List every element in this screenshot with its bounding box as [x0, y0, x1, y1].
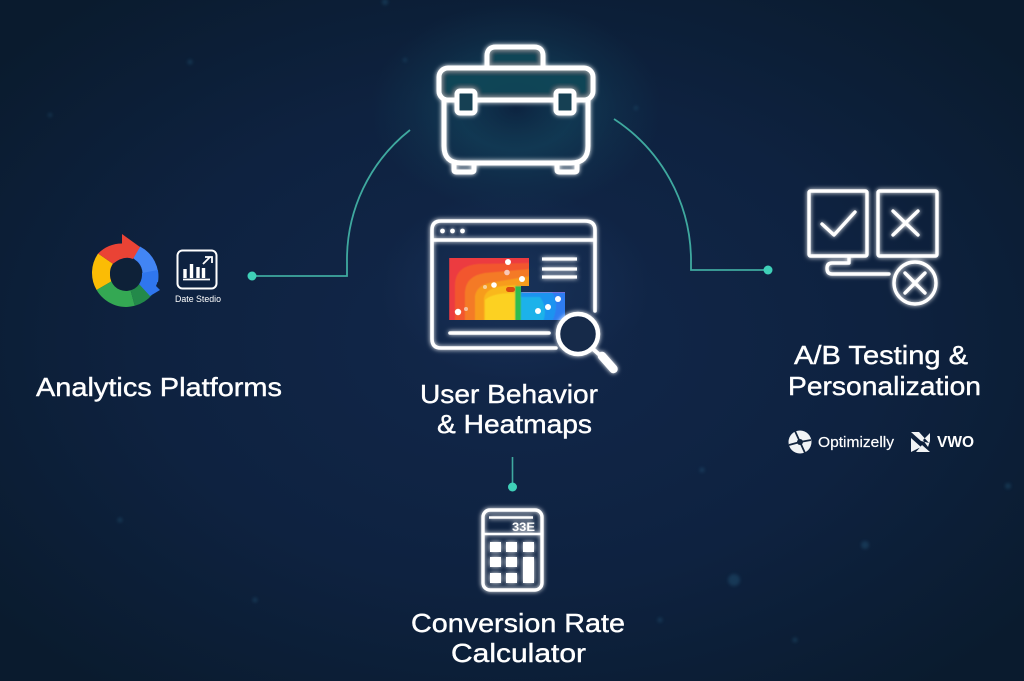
icon: browser window — [432, 221, 595, 348]
panel: user behavior and heatmaps — [422, 214, 622, 439]
label: data studio: Date Stedio — [175, 294, 221, 305]
heading: conversion rate calculator: Calculator — [451, 638, 586, 668]
heading: conversion rate calculator — [411, 608, 625, 668]
panel: toolkit icon — [371, 3, 661, 213]
arrow: right arc connector — [614, 119, 772, 274]
icon: a/b test screens — [809, 191, 937, 304]
logo: vwo — [911, 432, 974, 452]
icon: data studio chart — [178, 250, 216, 288]
icon: calculator — [483, 510, 542, 590]
logo: optimizely — [788, 430, 895, 454]
chart: heatmap — [449, 256, 567, 322]
heading: analytics platforms: Analytics Platforms — [36, 372, 282, 402]
panel: analytics platforms — [36, 234, 282, 402]
logo: vwo: VWO — [937, 434, 974, 451]
icon: google analytics ring — [92, 234, 160, 307]
icon: magnifying glass — [558, 314, 614, 369]
icon: calculator: 33E — [512, 520, 535, 534]
panel: a/b testing and personalization — [788, 191, 981, 454]
arrow: left arc connector — [248, 130, 410, 280]
heading: conversion rate calculator: Conversion Rate — [411, 608, 625, 638]
heading: a/b testing and personalization: Personalization — [788, 371, 981, 401]
logo: optimizely: Optimizelly — [818, 435, 895, 451]
heading: user behavior and heatmaps — [420, 379, 598, 439]
arrow: down connector — [508, 457, 517, 492]
heading: user behavior and heatmaps: & Heatmaps — [437, 409, 592, 439]
heading: a/b testing and personalization: A/B Testing & — [794, 340, 968, 370]
panel: conversion rate calculator — [411, 510, 625, 668]
heading: a/b testing and personalization — [788, 340, 981, 401]
heading: user behavior and heatmaps: User Behavior — [420, 379, 598, 409]
